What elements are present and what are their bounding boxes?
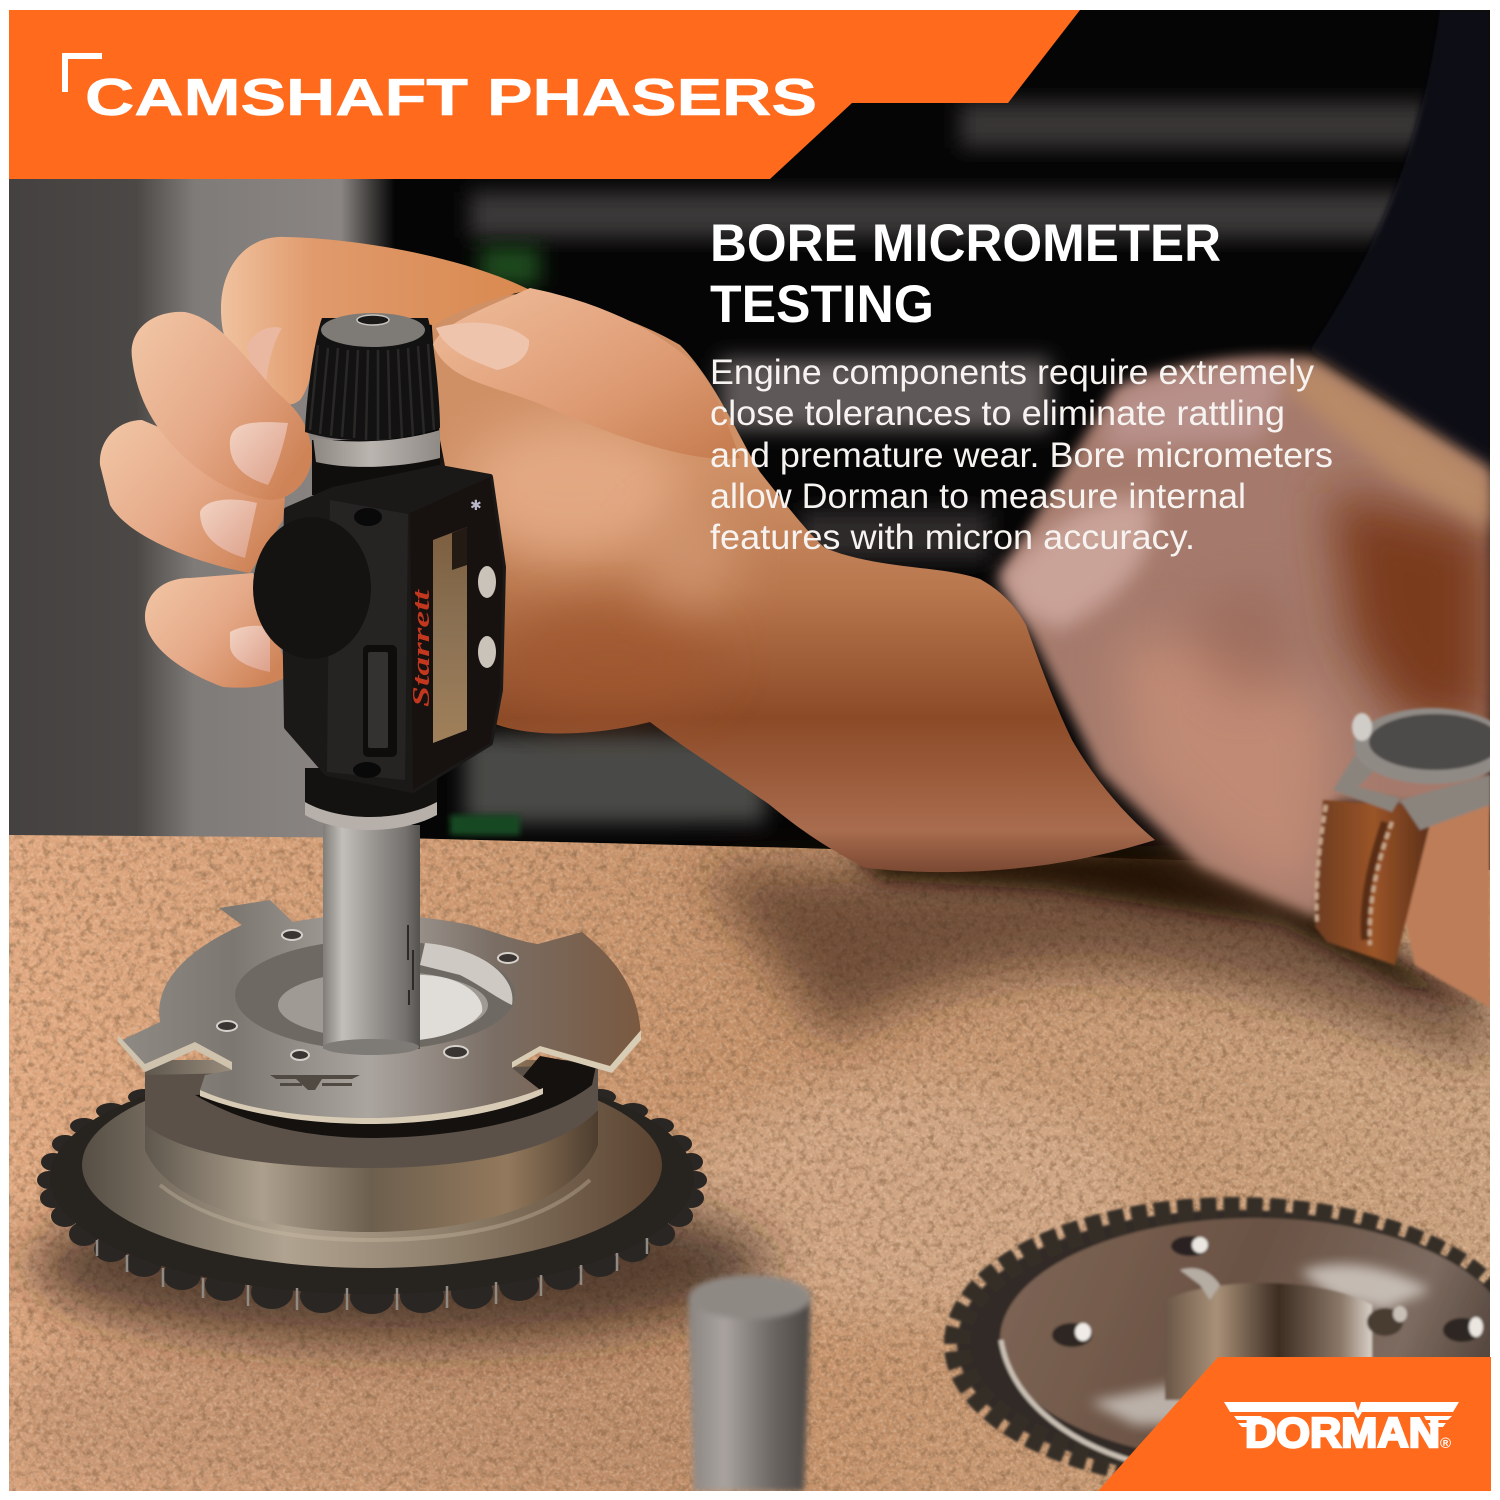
- bore hole: [278, 973, 488, 1033]
- body text: allow Dorman to measure internal: [710, 476, 1246, 516]
- body text: Engine components require extremely: [710, 352, 1314, 392]
- camshaft phaser: [37, 900, 707, 1314]
- knob top: [321, 313, 425, 347]
- body text: close tolerances to eliminate rattling: [710, 393, 1285, 433]
- body text: [710, 352, 1333, 557]
- middle finger: [132, 312, 312, 500]
- title banner: [9, 10, 1080, 179]
- ring finger: [100, 420, 285, 573]
- battery slot: [363, 645, 397, 757]
- sprocket metal face: [1000, 1218, 1500, 1462]
- body: [285, 468, 503, 790]
- hand and forearm: [100, 237, 1155, 872]
- lower neck: [305, 768, 437, 826]
- top plate: [118, 900, 641, 1122]
- phaser shadow on counter: [30, 1185, 770, 1345]
- buttons: [478, 566, 496, 598]
- granite countertop: [9, 835, 1490, 1491]
- palm and forearm: [430, 294, 1155, 872]
- arm shadow on counter: [700, 845, 1490, 1060]
- dark sleeve: [1310, 10, 1490, 470]
- second sprocket, lower right: [957, 1210, 1500, 1478]
- outer sprocket ring: [50, 1101, 694, 1294]
- micrometer rod: [323, 825, 420, 1055]
- upper finger: [221, 237, 530, 405]
- gap under plate: [195, 1056, 596, 1138]
- title: CAMSHAFT PHASERS: [85, 69, 817, 127]
- digital micrometer head: [253, 313, 503, 830]
- brand name: Starrett: [409, 588, 435, 707]
- silver ring: [313, 430, 440, 467]
- watch crown: [1352, 713, 1372, 741]
- silver collar: [305, 802, 437, 830]
- heading: BORE MICROMETER: [710, 214, 1221, 273]
- steel pin: [688, 1275, 811, 1491]
- watch case: [1354, 708, 1500, 784]
- upper black collar: [312, 440, 440, 495]
- watch lug: [1333, 755, 1490, 830]
- rod scale marks: [408, 925, 413, 1005]
- plate screws: [217, 930, 518, 1060]
- banner shape: [9, 10, 1080, 179]
- background workshop wall: [9, 10, 1490, 890]
- forearm beyond watch: [1400, 780, 1490, 1008]
- blurred rear forearm and elbow: [1000, 356, 1490, 918]
- housing cylinder: [145, 1060, 598, 1232]
- body text: and premature wear. Bore micrometers: [710, 435, 1333, 475]
- logo: wings: [1224, 1402, 1459, 1427]
- knurled knob: [305, 318, 440, 440]
- logo: registered mark: ®: [1440, 1435, 1451, 1452]
- heading: [710, 214, 1221, 334]
- little finger: [145, 573, 290, 688]
- screw holes: [354, 508, 382, 526]
- bluetooth mark: ✱: [470, 497, 482, 513]
- orange corner: [1098, 1357, 1491, 1491]
- heading: TESTING: [710, 275, 934, 334]
- watch dial: [1369, 714, 1500, 770]
- sprocket teeth: [957, 1210, 1500, 1478]
- wristwatch: [1315, 708, 1500, 1008]
- body faces: [410, 477, 503, 790]
- center hub: [1165, 1283, 1372, 1400]
- tooth highlights: [97, 1238, 647, 1310]
- sprocket teeth: [37, 1089, 707, 1314]
- thumb: [433, 288, 740, 459]
- LCD window: [433, 527, 467, 743]
- body text: features with micron accuracy.: [710, 517, 1195, 557]
- corner bracket: [65, 56, 102, 92]
- leather strap: [1315, 800, 1433, 965]
- sprocket disc: [82, 1100, 662, 1268]
- engraved logo on plate: [270, 1075, 360, 1090]
- logo panel: [1098, 1357, 1491, 1491]
- bore recess: [235, 940, 515, 1050]
- round side cap: [253, 517, 371, 659]
- logo: wordmark: DORMAN: [1245, 1409, 1440, 1456]
